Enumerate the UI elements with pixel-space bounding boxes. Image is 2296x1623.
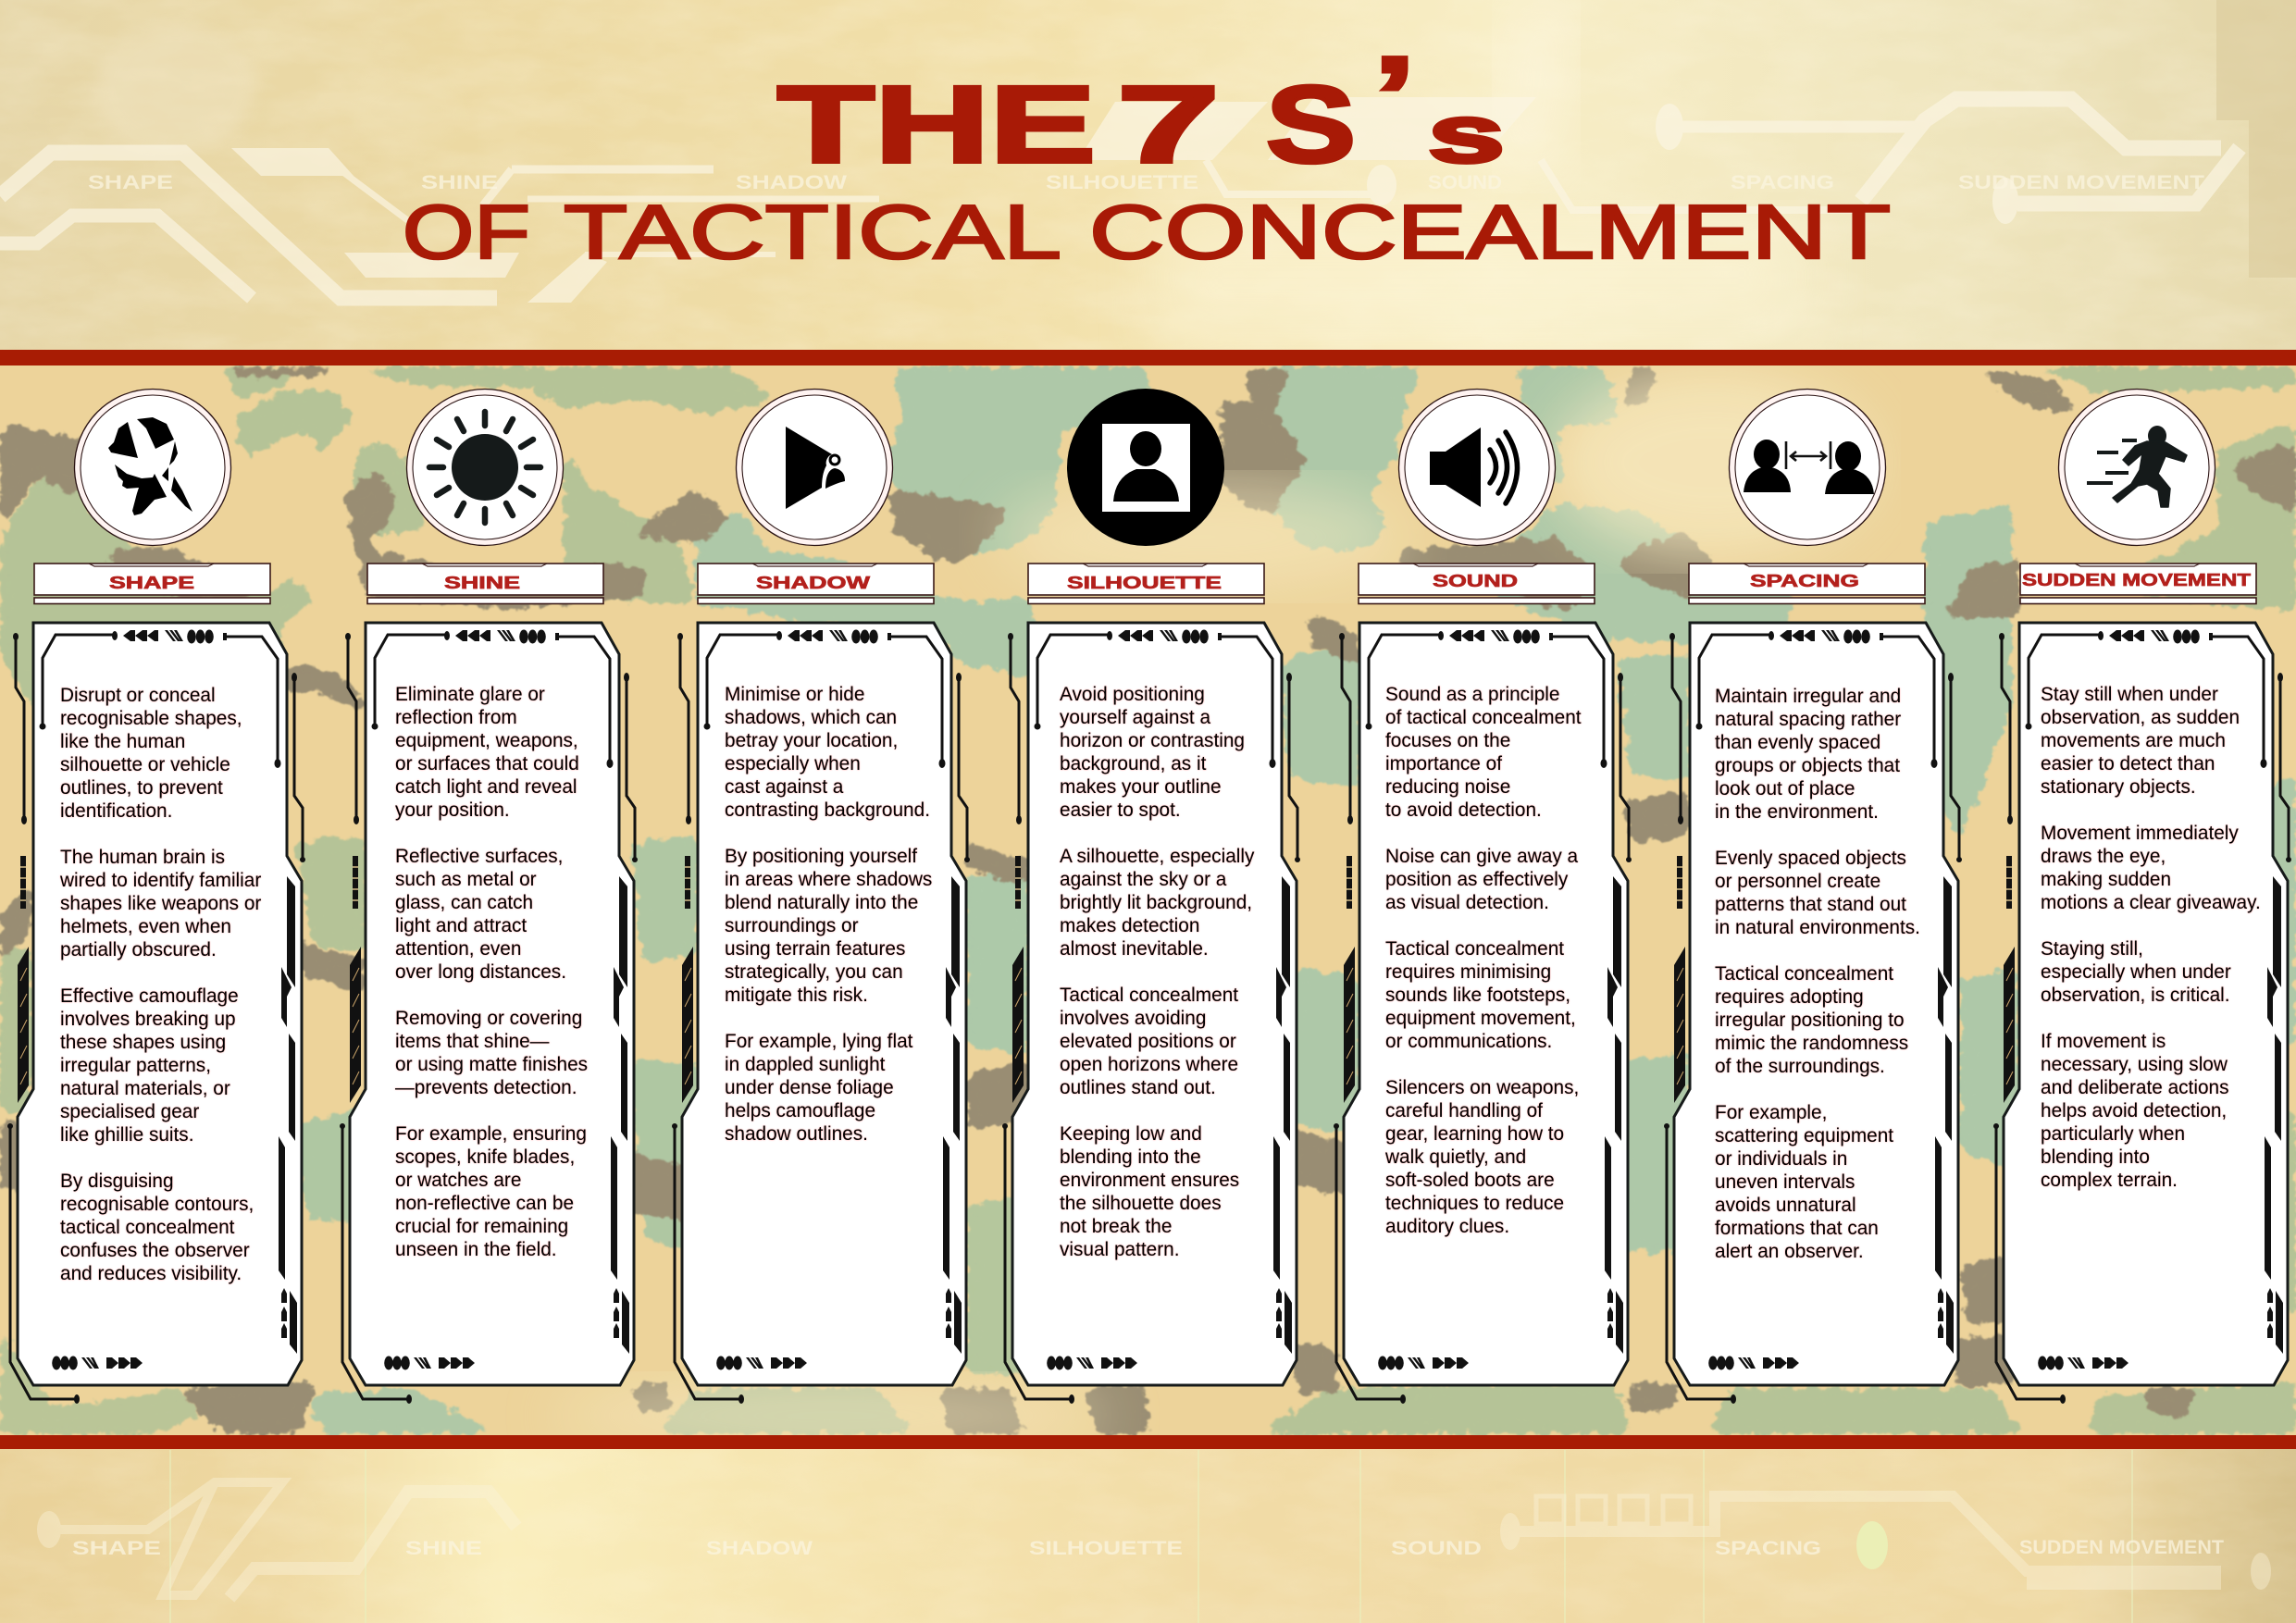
label plate: shine [367, 564, 603, 603]
text: spacing: look out of place [1715, 778, 1855, 799]
title line 1: THE [777, 64, 1096, 186]
text: shape: specialised gear [60, 1101, 199, 1122]
panel frame: shine [340, 623, 638, 1404]
text: shadow: shadow outlines. [725, 1123, 868, 1145]
text: sound: to avoid detection. [1385, 799, 1542, 821]
text: spacing: irregular positioning to [1715, 1010, 1905, 1031]
panel frame: sound [1334, 623, 1632, 1404]
icon: speaker [1399, 389, 1555, 546]
text: shine: Eliminate glare or [395, 684, 545, 705]
text: shadow: By positioning yourself [725, 846, 917, 867]
decoration: top faint labels: SHINE [421, 172, 498, 193]
text: spacing: formations that can [1715, 1218, 1879, 1239]
text: sound: importance of [1385, 753, 1502, 774]
text: shine: such as metal or [395, 869, 537, 890]
text: shine: —prevents detection. [395, 1077, 577, 1098]
text: spacing: in the environment. [1715, 801, 1879, 823]
label plate: sound: SOUND [1433, 572, 1518, 590]
text: spacing: alert an observer. [1715, 1241, 1864, 1262]
label plate: silhouette [1028, 564, 1264, 603]
text: shine: or watches are [395, 1170, 521, 1191]
background: bottom paper band [0, 1449, 2296, 1623]
text: spacing: uneven intervals [1715, 1171, 1855, 1193]
label plate: sudden movement: SUDDEN MOVEMENT [2022, 571, 2251, 589]
text: shadow: especially when [725, 753, 861, 774]
text: silhouette: Avoid positioning [1060, 684, 1205, 705]
text: spacing [1714, 686, 1920, 1262]
text: sudden movement: Stay still when under [2041, 684, 2218, 705]
title line 2: CONCEALMENT [1089, 189, 1891, 275]
text: shape: natural materials, or [60, 1078, 230, 1099]
decoration: bottom faint labels [72, 1537, 2224, 1559]
text: sound: position as effectively [1385, 869, 1568, 890]
background: camouflage band [0, 365, 2296, 1453]
text: spacing: Maintain irregular and [1715, 686, 1901, 707]
text: shape: outlines, to prevent [60, 777, 223, 799]
text: shine: scopes, knife blades, [395, 1146, 575, 1168]
text: sound: sounds like footsteps, [1385, 985, 1570, 1006]
text: shape [59, 685, 262, 1284]
text: silhouette: almost inevitable. [1060, 938, 1209, 960]
text: sudden movement: necessary, using slow [2041, 1054, 2228, 1075]
text: sound: Tactical concealment [1385, 938, 1564, 960]
text: silhouette: the silhouette does [1060, 1193, 1222, 1214]
text: shape: wired to identify familiar [60, 870, 261, 891]
decoration: top faint labels: SUDDEN MOVEMENT [1958, 172, 2204, 193]
text: shadow: under dense foliage [725, 1077, 894, 1098]
decoration: bottom faint labels: SPACING [1715, 1538, 1821, 1559]
text: sudden movement: Staying still, [2041, 938, 2143, 960]
decoration: bottom faint labels: SHINE [405, 1538, 482, 1559]
title line 1: 7 [1117, 64, 1220, 186]
text: shine: Reflective surfaces, [395, 846, 563, 867]
text: shadow: Minimise or hide [725, 684, 864, 705]
text: silhouette: background, as it [1060, 753, 1206, 774]
text: sudden movement: Movement immediately [2041, 823, 2239, 844]
icon: shadow cone [737, 389, 892, 546]
icon: sun [407, 389, 563, 546]
decoration: bottom faint labels: SUDDEN MOVEMENT [2019, 1537, 2224, 1558]
decoration: top faint labels: SHAPE [88, 172, 173, 193]
text: shadow: betray your location, [725, 730, 898, 751]
title line 2: OF [403, 189, 530, 275]
label plate: shadow: SHADOW [756, 574, 870, 592]
text: shape: like ghillie suits. [60, 1124, 193, 1146]
text: spacing: natural spacing rather [1715, 709, 1901, 730]
text: shadow: For example, lying flat [725, 1031, 912, 1052]
text: silhouette: Tactical concealment [1060, 985, 1238, 1006]
text: sudden movement: movements are much [2041, 730, 2226, 751]
text: shine: light and attract [395, 915, 527, 936]
text: shine: or surfaces that could [395, 753, 579, 774]
text: silhouette: environment ensures [1060, 1170, 1239, 1191]
text: sound: techniques to reduce [1385, 1193, 1564, 1214]
text: shadow: in dappled sunlight [725, 1054, 885, 1075]
decoration: top faint labels: SHADOW [736, 172, 847, 193]
text: shape: shapes like weapons or [60, 893, 261, 914]
text: spacing: mimic the randomness [1715, 1033, 1908, 1054]
decoration: top faint labels: SILHOUETTE [1046, 172, 1198, 193]
text: spacing: or individuals in [1715, 1148, 1847, 1170]
text: silhouette [1059, 684, 1255, 1260]
text: spacing: Tactical concealment [1715, 963, 1893, 985]
text: shine: crucial for remaining [395, 1216, 568, 1237]
text: silhouette: visual pattern. [1060, 1239, 1179, 1260]
text: spacing: in natural environments. [1715, 917, 1920, 938]
decoration: bottom faint labels: SHADOW [706, 1538, 813, 1559]
text: silhouette: Keeping low and [1060, 1123, 1202, 1145]
text: sound [1384, 684, 1582, 1238]
text: sudden movement: stationary objects. [2041, 776, 2196, 798]
text: shape: The human brain is [60, 847, 225, 868]
text: silhouette: against the sky or a [1060, 869, 1226, 890]
text: silhouette: brightly lit background, [1060, 892, 1252, 913]
text: sound: or communications. [1385, 1031, 1552, 1052]
text: shine: reflection from [395, 707, 517, 728]
icon: running person [2058, 389, 2215, 546]
text: shape: and reduces visibility. [60, 1263, 242, 1284]
text: shine: or using matte finishes [395, 1054, 588, 1075]
text: shadow: contrasting background. [725, 799, 930, 821]
title line 2 [403, 189, 1891, 275]
text: silhouette: outlines stand out. [1060, 1077, 1216, 1098]
icon: helmeted head [74, 389, 231, 546]
text: shadow: surroundings or [725, 915, 859, 936]
panel frame: sudden movement [1993, 623, 2291, 1404]
text: sound: reducing noise [1385, 776, 1510, 798]
title line 2: TACTICAL [564, 189, 1061, 275]
text: sound: as visual detection. [1385, 892, 1549, 913]
text: spacing: For example, [1715, 1102, 1827, 1123]
text: shape: these shapes using [60, 1032, 226, 1053]
panel frame: shape [7, 623, 305, 1404]
text: shine [394, 684, 589, 1260]
text: shadow: strategically, you can [725, 961, 903, 983]
decoration: bottom faint labels: SILHOUETTE [1029, 1538, 1183, 1559]
text: shine: Removing or covering [395, 1008, 582, 1029]
text: shine: your position. [395, 799, 510, 821]
text: silhouette: blending into the [1060, 1146, 1201, 1168]
decoration: top faint labels [88, 172, 2204, 193]
text: sudden movement: particularly when [2041, 1123, 2185, 1145]
text: shadow: in areas where shadows [725, 869, 932, 890]
text: sound: Sound as a principle [1385, 684, 1559, 705]
text: shine: For example, ensuring [395, 1123, 587, 1145]
text: shape: identification. [60, 800, 172, 822]
label plate: silhouette: SILHOUETTE [1067, 574, 1222, 592]
text: silhouette: involves avoiding [1060, 1008, 1206, 1029]
icon: spaced people [1729, 389, 1886, 546]
text: shape: silhouette or vehicle [60, 754, 230, 775]
text: shine: catch light and reveal [395, 776, 577, 798]
text: silhouette: makes detection [1060, 915, 1199, 936]
text: sudden movement: draws the eye, [2041, 846, 2166, 867]
text: shadow: helps camouflage [725, 1100, 875, 1121]
text: spacing: requires adopting [1715, 986, 1864, 1008]
text: shadow: blend naturally into the [725, 892, 918, 913]
text: sudden movement: observation, is critical. [2041, 985, 2230, 1006]
text: shape: recognisable shapes, [60, 708, 242, 729]
bottom red rule [0, 1435, 2296, 1449]
text: silhouette: elevated positions or [1060, 1031, 1236, 1052]
text: shape: By disguising [60, 1171, 174, 1192]
text: sound: of tactical concealment [1385, 707, 1582, 728]
title [403, 33, 1891, 275]
panel frame: spacing [1664, 623, 1962, 1404]
title line 1: s [1428, 88, 1505, 180]
label plate: sound [1359, 564, 1595, 603]
text: sudden movement: easier to detect than [2041, 753, 2215, 774]
text: silhouette: yourself against a [1060, 707, 1210, 728]
text: sudden movement: If movement is [2041, 1031, 2166, 1052]
text: sudden movement: observation, as sudden [2041, 707, 2240, 728]
text: spacing: groups or objects that [1715, 755, 1900, 776]
label plate: shadow [698, 564, 934, 603]
label plate: shine: SHINE [444, 574, 520, 592]
panel frame: shadow [672, 623, 970, 1404]
text: silhouette: A silhouette, especially [1060, 846, 1254, 867]
text: shape: partially obscured. [60, 939, 217, 960]
label plate: shape [34, 564, 270, 603]
text: sudden movement: motions a clear giveaway. [2041, 892, 2261, 913]
label plate: shape: SHAPE [109, 574, 194, 592]
text: shape: Effective camouflage [60, 985, 239, 1007]
text: shape: tactical concealment [60, 1217, 234, 1238]
text: sound: equipment movement, [1385, 1008, 1576, 1029]
text: shine: equipment, weapons, [395, 730, 578, 751]
text: sudden movement: helps avoid detection, [2041, 1100, 2227, 1121]
text: spacing: avoids unnatural [1715, 1195, 1856, 1216]
label plate: spacing [1689, 564, 1925, 603]
text: sound: walk quietly, and [1385, 1146, 1526, 1168]
text: spacing: patterns that stand out [1715, 894, 1906, 915]
text: spacing: of the surroundings. [1715, 1056, 1885, 1077]
text: spacing: than evenly spaced [1715, 732, 1880, 753]
text: silhouette: horizon or contrasting [1060, 730, 1245, 751]
text: sound: gear, learning how to [1385, 1123, 1564, 1145]
decoration: bottom faint labels: SOUND [1391, 1538, 1482, 1559]
text: spacing: or personnel create [1715, 871, 1880, 892]
text: silhouette: easier to spot. [1060, 799, 1181, 821]
label plate: sudden movement [2020, 564, 2256, 603]
text: shape: recognisable contours, [60, 1194, 254, 1215]
text: sudden movement: especially when under [2041, 961, 2231, 983]
decoration: bottom circuit traces [37, 1482, 2271, 1598]
text: sudden movement: blending into [2041, 1146, 2150, 1168]
text: sound: focuses on the [1385, 730, 1510, 751]
text: sound: auditory clues. [1385, 1216, 1509, 1237]
text: shine: unseen in the field. [395, 1239, 557, 1260]
text: shine: over long distances. [395, 961, 566, 983]
text: sudden movement [2040, 684, 2261, 1192]
text: sudden movement: and deliberate actions [2041, 1077, 2228, 1098]
decoration: top faint labels: SPACING [1731, 172, 1834, 193]
text: shine: attention, even [395, 938, 521, 960]
text: shadow: mitigate this risk. [725, 985, 868, 1006]
top red rule [0, 350, 2296, 365]
decoration: top circuit traces [0, 97, 2240, 303]
text: sound: Silencers on weapons, [1385, 1077, 1579, 1098]
text: spacing: scattering equipment [1715, 1125, 1893, 1146]
text: shape: helmets, even when [60, 916, 231, 937]
text: silhouette: not break the [1060, 1216, 1172, 1237]
text: shadow [724, 684, 933, 1145]
decoration: top faint labels: SOUND [1428, 172, 1502, 193]
decoration: bottom faint labels: SHAPE [72, 1538, 161, 1559]
text: shape: involves breaking up [60, 1009, 236, 1030]
text: sound: soft-soled boots are [1385, 1170, 1555, 1191]
text: spacing: Evenly spaced objects [1715, 848, 1906, 869]
text: shine: non-reflective can be [395, 1193, 574, 1214]
decoration: bottom green node [1856, 1521, 1888, 1569]
text: silhouette: makes your outline [1060, 776, 1222, 798]
title line 1: S [1266, 64, 1356, 186]
text: shadow: cast against a [725, 776, 843, 798]
text: shape: like the human [60, 731, 185, 752]
text: sound: requires minimising [1385, 961, 1551, 983]
text: shadow: shadows, which can [725, 707, 897, 728]
text: sound: careful handling of [1385, 1100, 1543, 1121]
text: sudden movement: making sudden [2041, 869, 2171, 890]
title line 1: ’ [1373, 33, 1416, 159]
text: shine: items that shine— [395, 1031, 549, 1052]
text: shine: glass, can catch [395, 892, 533, 913]
panel frame: silhouette [1002, 623, 1300, 1404]
icon: silhouette portrait [1067, 389, 1224, 546]
background: top paper band [0, 0, 2296, 352]
text: silhouette: open horizons where [1060, 1054, 1238, 1075]
text: shadow: using terrain features [725, 938, 905, 960]
text: shape: irregular patterns, [60, 1055, 211, 1076]
label plate: spacing: SPACING [1750, 572, 1859, 590]
title line 1 [777, 33, 1505, 186]
text: shape: confuses the observer [60, 1240, 250, 1261]
text: sound: Noise can give away a [1385, 846, 1578, 867]
text: shape: Disrupt or conceal [60, 685, 216, 706]
text: sudden movement: complex terrain. [2041, 1170, 2178, 1191]
